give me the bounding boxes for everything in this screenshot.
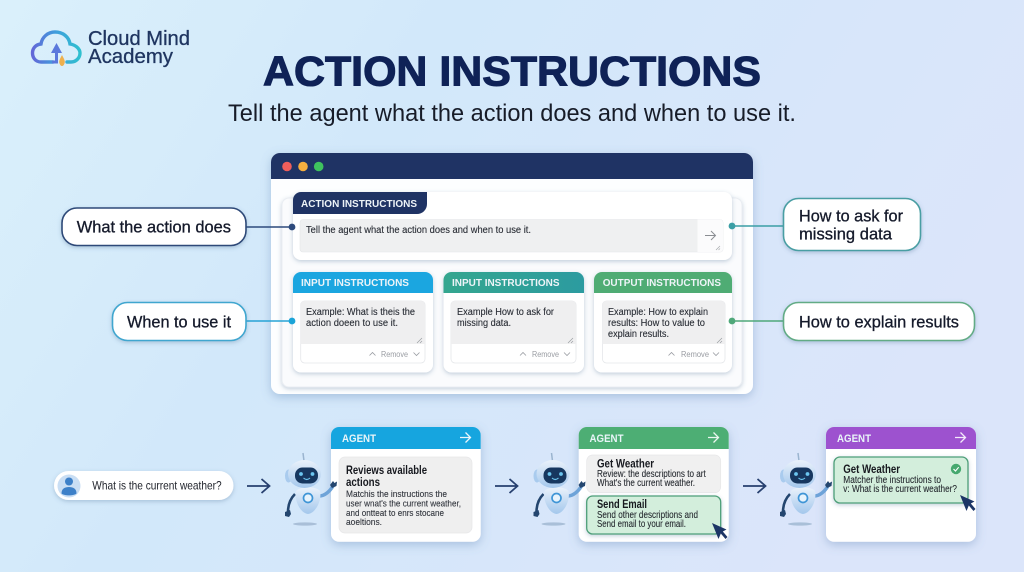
panel: agent reviews actions: AGENT xyxy=(342,433,376,445)
logo wordmark: Cloud Mind xyxy=(88,28,190,50)
review box: Matchis the instructions the xyxy=(346,489,447,499)
icon: cursor xyxy=(960,495,976,511)
user question pill xyxy=(54,471,234,500)
option: get weather: Get Weather xyxy=(597,458,654,470)
callout: when to use it xyxy=(112,302,295,340)
review box: and ontteat to enrs stocane xyxy=(346,508,444,518)
arrow: step 1 to step 2 xyxy=(495,479,518,493)
callout: what the action does xyxy=(62,208,295,246)
logo wordmark: Academy xyxy=(88,46,173,68)
icon: check mark xyxy=(951,464,961,474)
input box: Remove xyxy=(381,349,408,359)
panel: input instructions 2: INPUT INSTRUCTIONS xyxy=(452,277,560,289)
panel: agent compares actions: AGENT xyxy=(590,433,624,445)
tab: action instructions: ACTION INSTRUCTIONS xyxy=(301,198,417,210)
review box: actions xyxy=(346,477,380,489)
icon: arrow xyxy=(705,231,716,240)
arrow: user to agent xyxy=(247,479,270,493)
inner panel xyxy=(282,198,742,387)
robot 3 xyxy=(780,453,832,526)
option: get weather xyxy=(587,455,721,493)
input box: explain results. xyxy=(608,329,669,340)
panel: application window xyxy=(271,153,753,394)
subtitle: Tell the agent what the action does and when to use it. xyxy=(228,100,796,127)
option: get weather selected: Get Weather xyxy=(843,464,900,476)
input box xyxy=(602,301,725,363)
panel: agent reviews actions xyxy=(331,427,481,542)
input box: action doeen to use it. xyxy=(306,318,398,329)
panel: action instructions xyxy=(293,192,732,260)
icon: cloud with upload arrow xyxy=(32,32,80,66)
option: get weather selected xyxy=(834,457,968,503)
callout: when to use it: When to use it xyxy=(127,313,231,331)
panel: output instructions xyxy=(594,272,732,372)
panel: input instructions 2 xyxy=(444,272,584,372)
callout: how to ask for missing data xyxy=(729,198,920,250)
logo wordmark xyxy=(88,28,190,68)
panel: output instructions: OUTPUT INSTRUCTIONS xyxy=(603,277,721,289)
option: send email highlighted xyxy=(587,496,721,534)
robot 2 xyxy=(534,453,586,526)
input box: Remove xyxy=(681,349,709,359)
callout: what the action does: What the action does xyxy=(77,219,231,237)
callout: how to explain results xyxy=(729,302,974,340)
option: send email highlighted: Send Email xyxy=(597,499,647,511)
option: get weather: Review: the descriptions to art xyxy=(597,469,706,480)
review box xyxy=(339,457,472,533)
panel: agent compares actions xyxy=(579,427,729,542)
robot 1 xyxy=(285,453,337,526)
text area: Tell the agent what the action does and when to use it. xyxy=(306,225,531,236)
window title bar xyxy=(271,153,753,179)
callout: how to explain results: How to explain results xyxy=(799,313,959,331)
option: get weather selected: Matcher the instructions to xyxy=(843,475,941,486)
tab: action instructions xyxy=(293,192,427,214)
option: get weather selected: v: What is the current weather? xyxy=(843,484,957,495)
input box: missing data. xyxy=(457,318,511,329)
callout: how to ask for missing data: missing data xyxy=(799,226,893,244)
option: send email highlighted: Send other descriptions and xyxy=(597,510,698,521)
input box: Remove xyxy=(532,349,559,359)
input box: results: How to value to xyxy=(608,318,705,329)
icon: user avatar xyxy=(58,474,80,498)
text area xyxy=(300,220,723,252)
input box xyxy=(451,301,576,363)
review box: aoeltions. xyxy=(346,517,382,527)
input box: Example How to ask for xyxy=(457,307,555,318)
review box: Reviews available xyxy=(346,465,427,477)
option: send email highlighted: Send email to your email. xyxy=(597,519,686,530)
callout: how to ask for missing data: How to ask for xyxy=(799,208,903,226)
panel: agent selects action: AGENT xyxy=(837,433,871,445)
panel: input instructions 1: INPUT INSTRUCTIONS xyxy=(301,277,409,289)
logo: Cloud Mind Academy xyxy=(32,28,190,68)
option: get weather: What's the current weather. xyxy=(597,478,695,489)
panel: input instructions 1 xyxy=(293,272,433,372)
window control dots xyxy=(282,162,324,171)
review box: user wnat's the current weather, xyxy=(346,498,461,508)
panel: agent selects action xyxy=(826,427,976,542)
input box: Example: How to explain xyxy=(608,307,708,318)
input box: Example: What is theis the xyxy=(306,307,415,318)
user question pill: What is the current weather? xyxy=(92,478,222,492)
arrow: step 2 to step 3 xyxy=(743,479,766,493)
title: ACTION INSTRUCTIONS xyxy=(263,48,761,94)
input box xyxy=(301,301,425,363)
icon: cursor xyxy=(712,523,728,539)
